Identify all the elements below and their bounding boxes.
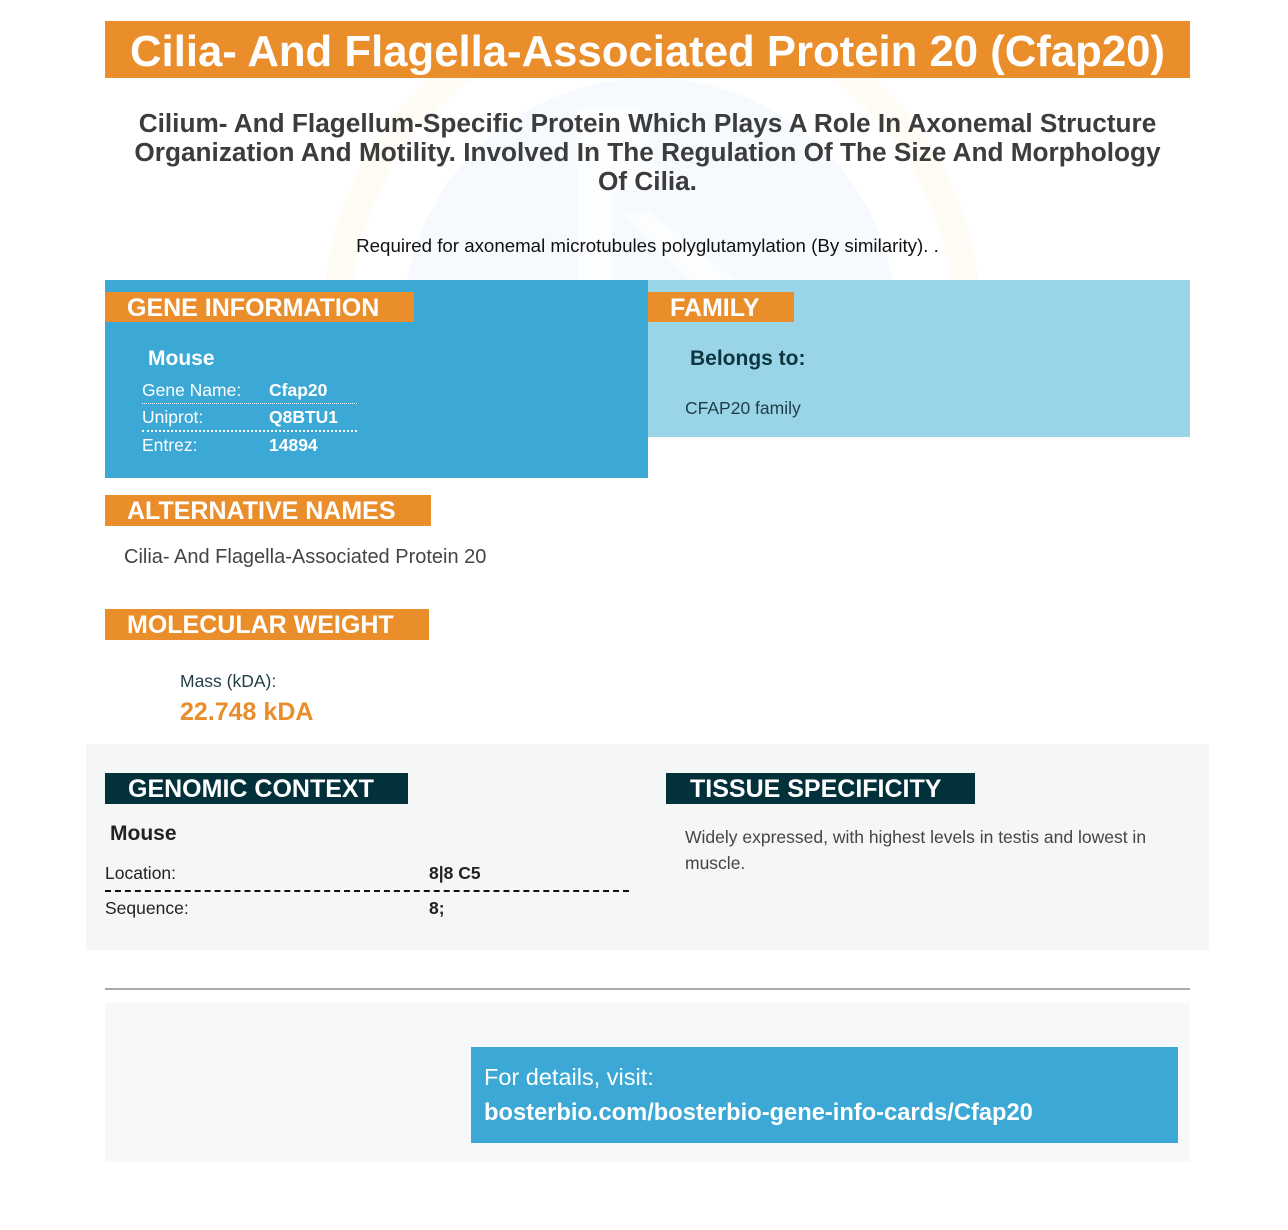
genomic rows: Location: (105, 863, 176, 883)
panel: genomic and tissue band (86, 744, 1209, 950)
gene rows: Cfap20 (269, 380, 327, 400)
heading: molecular weight: MOLECULAR WEIGHT (127, 611, 394, 639)
genomic species label: Mouse (110, 822, 177, 845)
genomic rows: 8|8 C5 (429, 863, 481, 883)
alternative names text: Cilia- And Flagella-Associated Protein 20 (124, 546, 486, 568)
background watermark (326, 78, 978, 280)
panel: gene information (105, 280, 648, 478)
heading: gene information: GENE INFORMATION (127, 294, 379, 322)
subtitle: Cilium- And Flagellum-Specific Protein Which Plays A Role In Axonemal Structure Organization And Motility. Involved In The Regulation Of The Size And Morphology Of Cilia. (134, 108, 1161, 196)
callout url: bosterbio.com/bosterbio-gene-info-cards/Cfap20 (484, 1100, 1033, 1126)
genomic rows: 8; (429, 898, 445, 918)
tissue specificity text: Widely expressed, with highest levels in testis and lowest in muscle. (685, 827, 1146, 873)
callout: details link (471, 1047, 1178, 1143)
belongs to label: Belongs to: (690, 347, 806, 370)
genomic rows: Sequence: (105, 898, 189, 918)
mass value: 22.748 kDA (180, 698, 313, 726)
heading: tissue specificity: TISSUE SPECIFICITY (690, 775, 941, 803)
title banner: Cilia- And Flagella-Associated Protein 20 (Cfap20) (130, 27, 1165, 76)
genomic rows (105, 863, 629, 918)
description: Required for axonemal microtubules polyglutamylation (By similarity). . (356, 235, 939, 256)
heading: family: FAMILY (670, 294, 759, 322)
gene rows: Gene Name: (142, 380, 241, 400)
species label: Mouse (148, 347, 215, 370)
mass label: Mass (kDA): (180, 671, 276, 691)
gene rows: 14894 (269, 435, 318, 455)
heading: alternative names: ALTERNATIVE NAMES (127, 497, 396, 525)
gene rows (142, 380, 357, 455)
callout lead text: For details, visit: (484, 1064, 654, 1090)
family value: CFAP20 family (685, 398, 801, 418)
divider (105, 988, 1190, 990)
heading: genomic context: GENOMIC CONTEXT (128, 775, 374, 803)
gene rows: Uniprot: (142, 407, 203, 427)
panel: family (648, 280, 1190, 437)
gene rows: Q8BTU1 (269, 407, 338, 427)
heading: family (648, 292, 794, 322)
gene rows: Entrez: (142, 435, 197, 455)
panel: footer (105, 1003, 1190, 1162)
